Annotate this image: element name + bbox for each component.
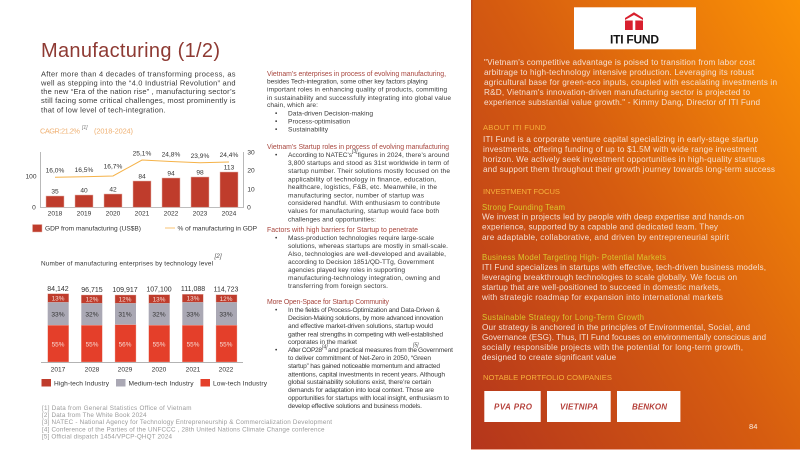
text column: startup roles: 3,800 startups and stood as 31st worldwide in term of <box>288 160 449 167</box>
totals: 107,100 <box>146 286 172 294</box>
text column: high barriers: Mass-production technologies require large-scale <box>288 235 434 242</box>
legend: GDP chart: % of manufacturing in GDP <box>178 226 258 232</box>
focus: business model: Business Model Targeting High- Potential Markets <box>482 253 666 262</box>
segment labels: 12% <box>119 296 132 304</box>
text column: enterprises evolving: • <box>275 126 278 134</box>
axis labels: 0 <box>247 204 251 212</box>
year labels: 2021 <box>186 366 201 374</box>
axis labels <box>25 150 255 218</box>
value labels <box>51 164 235 196</box>
page number: 84 <box>749 422 757 431</box>
text column: startup roles: values for manufacturing, startup would face both <box>288 208 439 215</box>
percentage labels <box>46 150 238 174</box>
logo: ITI Fund: ITI FUND <box>610 32 659 46</box>
totals: 96,715 <box>81 287 103 294</box>
focus: sustainable strategy: Governance (ESG). Thus, ITI Fund focuses on environmentally conscious and <box>482 333 766 342</box>
segment labels: 31% <box>118 312 132 319</box>
focus: strong founding team: experience, supported by a capable and dedicated team. They <box>482 223 719 232</box>
text column: startup roles: applicability of technology in finance, education, <box>288 176 436 184</box>
about section: ITI Fund is a corporate venture capital specializing in early-stage startup <box>483 135 758 144</box>
segment labels <box>51 296 233 349</box>
text column: high barriers: agencies played key roles in supporting <box>288 267 405 274</box>
CAGR label: (2018-2024) <box>94 126 133 136</box>
segment labels: 32% <box>152 312 166 319</box>
portfolio card: VIETNIPA <box>547 391 611 422</box>
focus: business model: leveraging breakthrough technologies to scale globally. We focus on <box>482 273 737 282</box>
text column: startup roles: healthcare, logistics, F&B, etc. Meanwhile, in the <box>288 184 437 191</box>
axis labels: 30 <box>247 150 255 156</box>
text column: startup roles: startup number. Their solutions mostly focused on the <box>288 168 450 175</box>
portfolio card: BENKON <box>617 391 680 422</box>
axis labels: 2021 <box>135 210 150 218</box>
footnotes: [3] NATEC - National Agency for Technology Entrepreneurship & Commercialization Development <box>42 419 332 426</box>
text column: startup roles: According to NATEC’s <box>288 152 353 159</box>
text column: enterprises evolving: besides Tech-integration, some other key factors playing <box>267 78 428 86</box>
percentage labels: 24,8% <box>162 152 180 158</box>
segment labels: 33% <box>219 312 233 319</box>
axis labels: 2024 <box>222 210 237 218</box>
footnotes <box>42 405 332 440</box>
focus: sustainable strategy: designed to create significant value <box>482 353 616 362</box>
text column: open space: global sustainability solutions exist, there’re certain <box>288 379 431 386</box>
combo chart: GDP from manufacturing <box>25 150 255 218</box>
intro paragraph: the new “Era of the nation rise” , manufacturing sector’s <box>41 87 236 96</box>
axis labels: 2018 <box>48 210 63 218</box>
value labels: 98 <box>196 170 204 176</box>
value labels: 42 <box>109 186 117 194</box>
footnotes: [2] Data from The White Book 2024 <box>42 412 147 419</box>
text column: open space: demands for adaptation into local context. Those are <box>288 387 434 394</box>
axis labels: 10 <box>247 186 255 194</box>
totals: 111,088 <box>181 286 205 293</box>
about section: horizon. We actively seek investment opportunities in high-quality startups <box>483 155 765 164</box>
bars: high-tech <box>48 294 237 303</box>
year labels <box>51 366 234 374</box>
year labels: 2022 <box>219 366 234 374</box>
focus: business model: startup that are well-positioned to succeed in domestic markets, <box>482 283 721 292</box>
axis labels: 2019 <box>77 210 92 218</box>
segment labels: 33% <box>186 312 200 319</box>
focus: strong founding team: Strong Founding Team <box>482 203 565 212</box>
year labels: 2020 <box>152 366 167 374</box>
text column: startup roles <box>267 144 450 224</box>
CAGR label: CAGR:21.2% <box>40 126 80 136</box>
intro paragraph: that of low level of tech-integration. <box>41 105 166 114</box>
quote: R&D, Vietnam's innovation-driven manufacturing sector is projected to <box>484 88 750 97</box>
quote: "Vietnam's competitive advantage is poised to transition from labor cost <box>484 58 756 67</box>
footnotes: [5] Official dispatch 1454/VPCP-QHQT 2024 <box>42 433 172 440</box>
quote: experience substantial value growth." - Kimmy Dang, Director of ITI Fund <box>484 98 760 107</box>
text column: startup roles: figures in 2024, there’s around <box>358 152 449 159</box>
text column: high barriers: according to Decision 1851/QD-TTg, Government <box>288 259 434 266</box>
legend: GDP chart: GDP from manufacturing (US$B) <box>45 226 141 232</box>
portfolio heading: NOTABLE PORTFOLIO COMPANIES <box>483 373 612 382</box>
focus: strong founding team: are adaptable, collaborative, and driven by entrepreneurial spirit <box>482 233 730 242</box>
focus: sustainable strategy <box>482 313 766 362</box>
segment labels: 55% <box>52 342 65 349</box>
percentage labels: 23,9% <box>191 153 209 160</box>
text column: open space: attentions, capital investments in recent years. Although <box>288 372 445 378</box>
about section: and support them throughout their growth journey towards long-term success <box>483 165 775 174</box>
text column: open space: Decision-Making solutions, by more advanced innovation <box>288 315 443 322</box>
stacked bar chart: enterprises <box>41 286 243 374</box>
axis labels: 100 <box>25 174 37 180</box>
text column: enterprises evolving: • <box>275 118 278 126</box>
text column: open space: startup” has gained noticeable momentum and attracted <box>288 363 440 370</box>
text column: high barriers <box>267 227 448 290</box>
bars: low-tech <box>48 325 237 362</box>
about section <box>483 123 775 174</box>
totals: 109,917 <box>112 287 138 294</box>
text column: enterprises evolving: Data-driven Decision-making <box>288 110 373 118</box>
quote <box>484 58 777 107</box>
text column: high barriers: manufacturing-technology integration, owning and <box>288 275 440 282</box>
text column: startup roles: [3] <box>351 149 358 155</box>
text column: open space <box>267 299 453 410</box>
text column: open space: • <box>275 307 278 314</box>
focus: sustainable strategy: Sustainable Strategy for Long-Term Growth <box>482 313 644 322</box>
text column: startup roles: Vietnam’s Startup roles in process of evolving manufacturing <box>267 144 449 151</box>
chart heading: enterprises by technology level: [2] <box>214 253 222 260</box>
legend: technology levels: Medium-tech Industry <box>128 380 194 388</box>
text column: open space: to deliver commitment of Net-Zero in 2050, “Green <box>288 355 431 362</box>
chart heading: enterprises by technology level: Number of manufacturing enterprises by technology level <box>41 260 213 268</box>
text column: high barriers: solutions, whereas startups are mostly in small-scale. <box>288 243 448 250</box>
percentage labels: 25,1% <box>133 150 151 158</box>
value labels: 35 <box>51 188 59 196</box>
text column: open space: In the fields of Process-Optimization and Data-Driven & <box>288 307 441 314</box>
legend: technology levels <box>42 379 268 388</box>
focus: business model <box>481 253 766 302</box>
value labels: 40 <box>80 188 88 194</box>
axis labels: 2023 <box>193 210 208 218</box>
segment labels: 56% <box>119 342 132 349</box>
text column: high barriers: • <box>275 235 278 242</box>
intro paragraph: well as stepping into the “4.0 Industrial Revolution” and <box>40 78 236 87</box>
focus: strong founding team: We invest in projects led by people with deep expertise and hands-on <box>482 213 744 222</box>
text column: startup roles: challenges and opportunities: <box>288 216 376 224</box>
focus: business model: ITI Fund specializes in startups with effective, tech-driven business models, <box>482 263 766 272</box>
text column: enterprises evolving: • <box>275 110 278 118</box>
portfolio card: BENKON: BENKON <box>632 402 667 412</box>
text column: enterprises evolving: in sustainability and successfully integrating into global value <box>267 95 451 102</box>
text column: open space: gather real strengths in competing with well-established <box>288 332 443 338</box>
text column: open space: and effective market-driven solutions, startup would <box>288 323 433 330</box>
CAGR label: [1] <box>81 125 88 131</box>
text column: open space: After COP28 <box>288 347 322 354</box>
value labels: 84 <box>138 174 146 180</box>
legend: GDP chart <box>32 224 258 232</box>
text column: startup roles: • <box>275 152 278 159</box>
segment labels: 12% <box>86 296 99 304</box>
bars: medium-tech <box>48 302 237 325</box>
segment labels: 13% <box>187 296 200 303</box>
about section: investments, offering funding of up to $1.5M with wide range investment <box>483 145 758 154</box>
text column: enterprises evolving: Sustainability <box>288 126 329 134</box>
line: % of GDP <box>55 160 229 177</box>
segment labels: 13% <box>52 296 65 303</box>
totals: 84,142 <box>47 286 69 293</box>
portfolio card: PVA PRO <box>484 391 541 422</box>
axis labels: 2022 <box>164 210 179 218</box>
chart heading: enterprises by technology level <box>41 253 222 268</box>
totals <box>47 286 238 294</box>
totals: 114,723 <box>214 286 238 294</box>
year labels: 2017 <box>51 366 66 374</box>
logo: ITI Fund <box>574 7 696 49</box>
value labels: 94 <box>167 170 175 178</box>
text column: enterprises evolving: chain, which are: <box>267 102 318 109</box>
value labels: 113 <box>224 164 235 172</box>
portfolio card: VIETNIPA: VIETNIPA <box>560 402 598 412</box>
text column: open space: and practical measures from the <box>328 347 417 354</box>
text column: open space: More Open-Space for Startup Community <box>267 299 390 306</box>
legend: technology levels: Low-tech Industry <box>213 380 268 388</box>
axis labels: 2020 <box>106 210 121 218</box>
focus: business model: with strategic roadmap for expansion into international markets <box>481 293 723 302</box>
intro paragraph: After more than 4 decades of transforming process, as <box>41 69 236 78</box>
footnotes: [1] Data from General Statistics Office of Vietnam <box>42 405 192 412</box>
legend: technology levels: High-tech Industry <box>54 380 110 388</box>
focus: sustainable strategy: Our strategy is anchored in the principles of Environmental, Social, and <box>482 323 750 332</box>
intro paragraph: still facing some critical challenges, most prominently is <box>41 96 236 105</box>
text column: enterprises evolving <box>267 71 451 134</box>
text column: open space: develop effective solutions and business models. <box>288 403 422 410</box>
segment labels: 55% <box>86 342 99 349</box>
text column: enterprises evolving: Vietnam’s enterprises in process of evolving manufacturing, <box>267 71 446 78</box>
title: Manufacturing (1/2) <box>41 40 220 62</box>
text column: high barriers: transferring from foreign sectors. <box>288 283 388 290</box>
text column: high barriers: Also, technologies are well-developed and available, <box>288 251 446 258</box>
percentage labels: 16,0% <box>46 167 64 174</box>
year labels: 2029 <box>118 366 133 374</box>
focus: sustainable strategy: socially responsible projects with the potential for long-term growth, <box>482 343 743 352</box>
text column: open space: [5] <box>412 342 419 348</box>
text column: open space: Government <box>418 347 453 354</box>
segment labels: 32% <box>85 312 99 319</box>
panel: ITI Fund <box>471 0 800 450</box>
about section: ABOUT ITI FUND <box>483 123 547 132</box>
icon: red house <box>625 12 643 30</box>
bars: GDP <box>46 172 238 207</box>
percentage labels: 24,4% <box>220 152 238 159</box>
footnotes: [4] Conference of the Parties of the UNFCCC , 28th United Nations Climate Change conference <box>42 426 325 434</box>
text column: open space: [4] <box>321 344 328 350</box>
segment labels: 55% <box>187 342 200 349</box>
segment labels: 33% <box>51 312 65 319</box>
year labels: 2028 <box>85 366 100 374</box>
quote: agricultural base for green-eco inputs, coupled with escalating investments in <box>484 78 777 87</box>
text column: high barriers: Factors with high barriers for Startup to penetrate <box>267 227 418 234</box>
percentage labels: 16,5% <box>75 167 93 174</box>
segment labels: 12% <box>220 296 233 303</box>
text column: open space: • <box>275 347 278 354</box>
intro paragraph <box>40 69 236 114</box>
investment focus heading: INVESTMENT FOCUS <box>483 187 560 196</box>
percentage labels: 16,7% <box>104 163 122 170</box>
focus: strong founding team <box>482 203 744 242</box>
text column: enterprises evolving: Process-optimisation <box>288 118 350 126</box>
axis labels: 20 <box>247 168 255 174</box>
segment labels: 55% <box>153 342 166 349</box>
segment labels: 55% <box>220 342 233 349</box>
axis labels: 0 <box>32 204 36 212</box>
text column: open space: opportunities for startups with local insight, enthusiasm to <box>288 395 449 402</box>
text column: startup roles: manufacturing sector, number of startup was <box>288 192 425 200</box>
text column: open space: corporates in the market <box>288 339 357 346</box>
text column: startup roles: considered handful. With enthusiasm to contribute <box>288 200 440 207</box>
CAGR label <box>40 125 133 136</box>
segment labels: 13% <box>153 296 166 303</box>
text column: enterprises evolving: important roles in enhancing quality of products, commiting <box>267 86 447 94</box>
portfolio card: PVA PRO: PVA PRO <box>494 402 533 412</box>
quote: arbitrage to high-technology intensive production. Leveraging its robust <box>484 68 755 77</box>
